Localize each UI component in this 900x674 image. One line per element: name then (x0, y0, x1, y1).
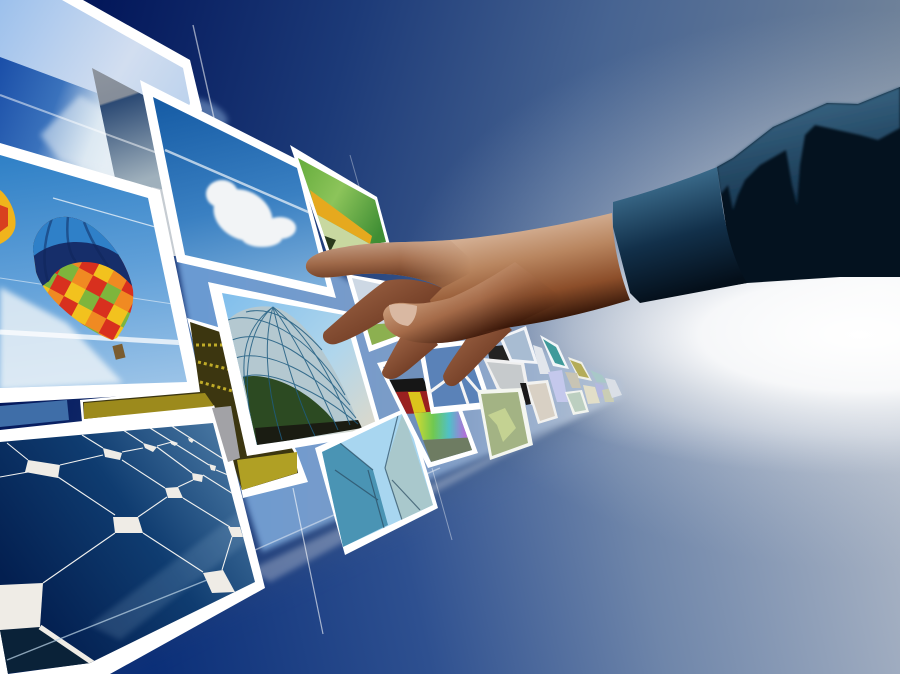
cloud (204, 179, 296, 251)
panel: cloud photo (140, 80, 340, 300)
panel: green photo under finger (346, 274, 414, 352)
panel: small photo under hand (418, 340, 493, 414)
index finger shading (306, 240, 480, 288)
thumbnail: leaf (477, 388, 533, 460)
thumbnail: far cream (583, 385, 600, 404)
thumbnail: narrow (533, 345, 551, 374)
light streaks (193, 25, 452, 634)
thumbnail: pale lines (525, 380, 558, 424)
panel: ocean photo (0, 0, 202, 200)
icon: hot air balloon large (33, 216, 134, 360)
panel: circuit board photo (80, 318, 308, 498)
back of hand and index finger (306, 213, 630, 340)
panel: rainbow photo (377, 360, 478, 468)
panel: green corn photo (290, 145, 390, 256)
thumb (383, 264, 514, 344)
thumbnail: stone (565, 372, 581, 388)
panel: balloon photo (0, 143, 213, 403)
thumbnail: far pale (605, 378, 622, 398)
thumbnail: purple (548, 370, 568, 402)
thumbnail: far lilac (595, 383, 606, 398)
thumbnail: black and white upper (487, 345, 510, 362)
little finger (443, 324, 512, 386)
hand (306, 213, 630, 386)
thumbnail nail (389, 304, 417, 326)
panel group: receding thumbnails (477, 326, 622, 460)
panel: narrow grey strip beside balloon photo (152, 187, 178, 256)
thumbnail: sketch (483, 358, 532, 405)
thumbnail: teal (540, 335, 569, 369)
thumbnail: tiny teal (590, 370, 607, 383)
middle finger (323, 279, 442, 344)
thumbnail: far olive (602, 388, 614, 402)
back plane behind photos (165, 190, 622, 582)
thumbnail: dark sliver (520, 383, 531, 405)
panel: dome photo (208, 282, 385, 456)
thumbnail: sky field (565, 390, 589, 415)
panel: buildings photo (315, 407, 438, 555)
thumbnail: tower (499, 326, 538, 364)
thumbnail: olive (568, 357, 592, 381)
panel: solar cells photo (0, 406, 265, 674)
ring finger (382, 336, 438, 379)
solar grid lines (0, 426, 235, 592)
glass dome (228, 306, 362, 446)
sleeve and cuff (613, 87, 900, 303)
icon: hot air balloon small (0, 190, 16, 244)
panel: strip under balloon (0, 400, 69, 427)
solar junctions (0, 438, 243, 630)
